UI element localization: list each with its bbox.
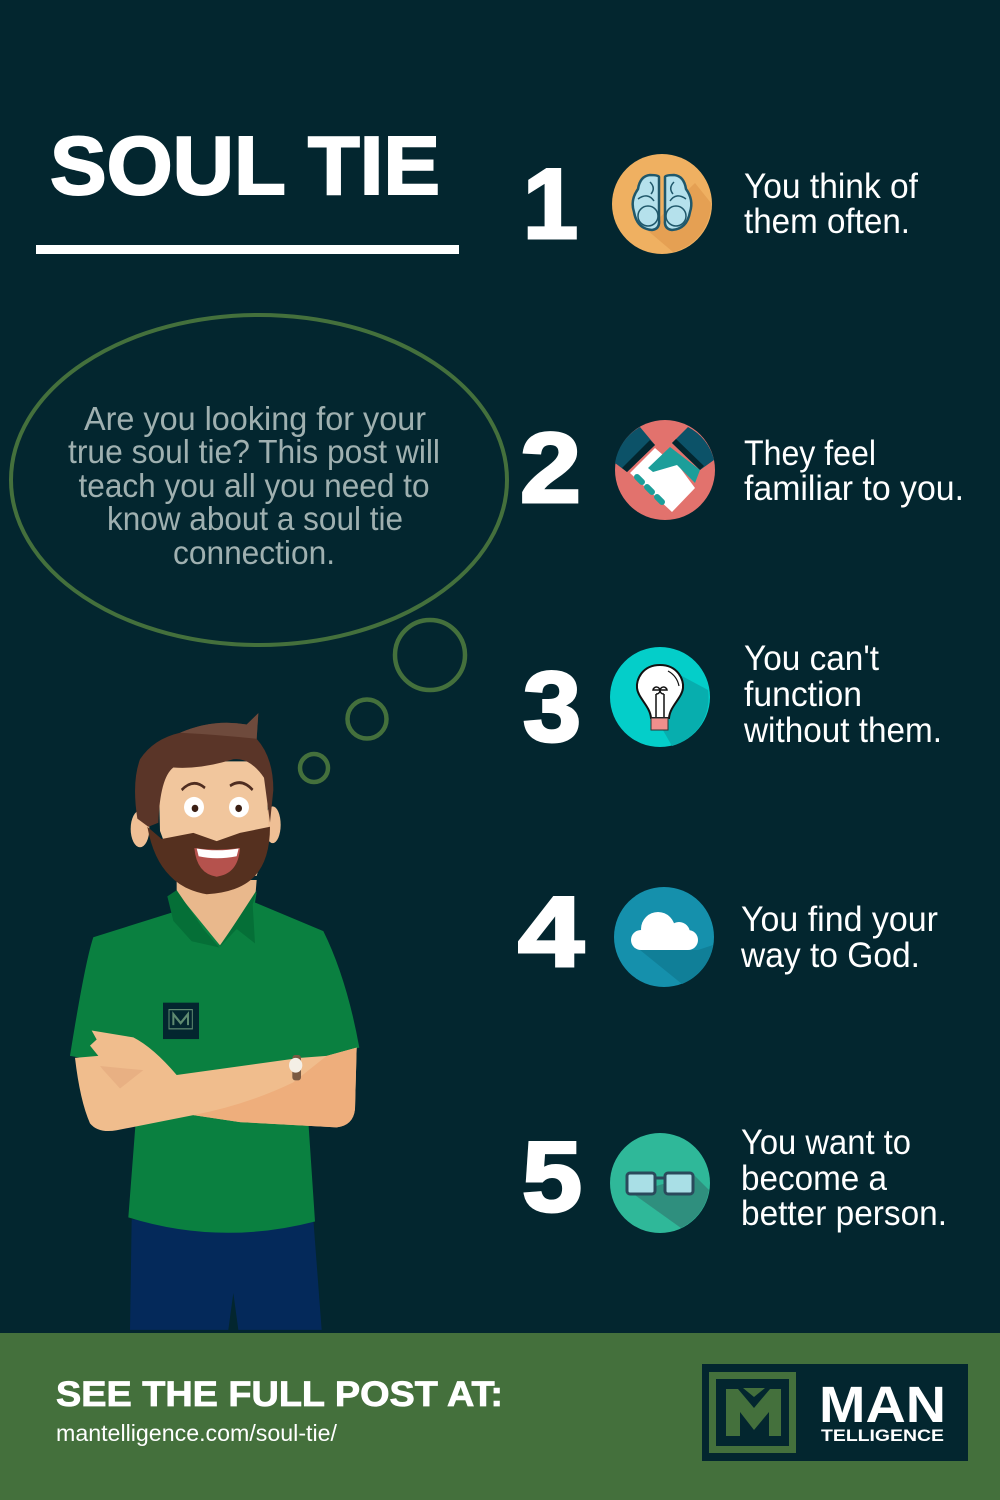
arms (75, 1030, 357, 1131)
character: man with crossed arms (70, 713, 359, 1330)
text 1: them often. (744, 202, 910, 241)
bubble text: know about a soul tie (107, 500, 403, 537)
text 3: without them. (743, 711, 942, 750)
footer url: mantelligence.com/soul-tie/ (56, 1420, 338, 1446)
text 1 (744, 167, 918, 241)
text 3: You can't (744, 639, 879, 678)
bubble text: connection. (173, 534, 335, 571)
shirt badge (163, 1003, 199, 1039)
text 5: become a (741, 1159, 887, 1198)
hair (135, 713, 273, 827)
collar (167, 890, 257, 947)
item 2 (520, 412, 964, 523)
text 1: You think of (744, 167, 918, 206)
eyebrows (182, 783, 205, 790)
watch (289, 1055, 302, 1080)
number 4: 4 (518, 876, 584, 987)
icon: glasses (610, 1133, 710, 1233)
text 5 (741, 1123, 947, 1233)
text 5: better person. (741, 1194, 947, 1233)
text 3 (743, 639, 942, 750)
text 5: You want to (741, 1123, 911, 1162)
text 2 (744, 434, 964, 508)
item 1 (523, 148, 918, 259)
title: SOUL TIE (50, 119, 440, 212)
icon: light bulb (610, 647, 710, 747)
neck (177, 880, 257, 945)
bubble text: true soul tie? This post will (68, 433, 440, 470)
text 4: way to God. (740, 936, 920, 975)
face (158, 761, 268, 876)
bubble text: Are you looking for your (84, 400, 426, 437)
number 5: 5 (522, 1121, 582, 1232)
text 2: They feel (744, 434, 876, 473)
thought bubble (11, 315, 507, 782)
icon: brain (612, 154, 712, 254)
shirt (70, 892, 359, 1233)
item 4 (518, 876, 938, 987)
text 4 (740, 900, 938, 975)
icon: cloud (614, 887, 714, 987)
bubble text: teach you all you need to (78, 467, 430, 504)
logo: MAN (819, 1376, 946, 1433)
beard (147, 827, 270, 894)
number 1: 1 (523, 148, 578, 259)
number 2: 2 (520, 412, 581, 523)
title underline (36, 245, 459, 254)
number 3: 3 (523, 651, 581, 762)
text 3: function (744, 675, 862, 714)
eyes (184, 797, 204, 817)
text 2: familiar to you. (744, 469, 964, 508)
item 3 (523, 639, 942, 762)
footer heading: SEE THE FULL POST AT: (56, 1375, 503, 1414)
item 5 (522, 1121, 947, 1233)
icon: handshake (615, 420, 715, 520)
logo (702, 1364, 968, 1461)
bubble text (68, 400, 440, 571)
trousers (130, 1219, 322, 1330)
logo: TELLIGENCE (821, 1426, 944, 1445)
ears (131, 810, 149, 847)
mouth (194, 848, 240, 877)
footer band (0, 1333, 1000, 1500)
text 4: You find your (741, 900, 938, 939)
